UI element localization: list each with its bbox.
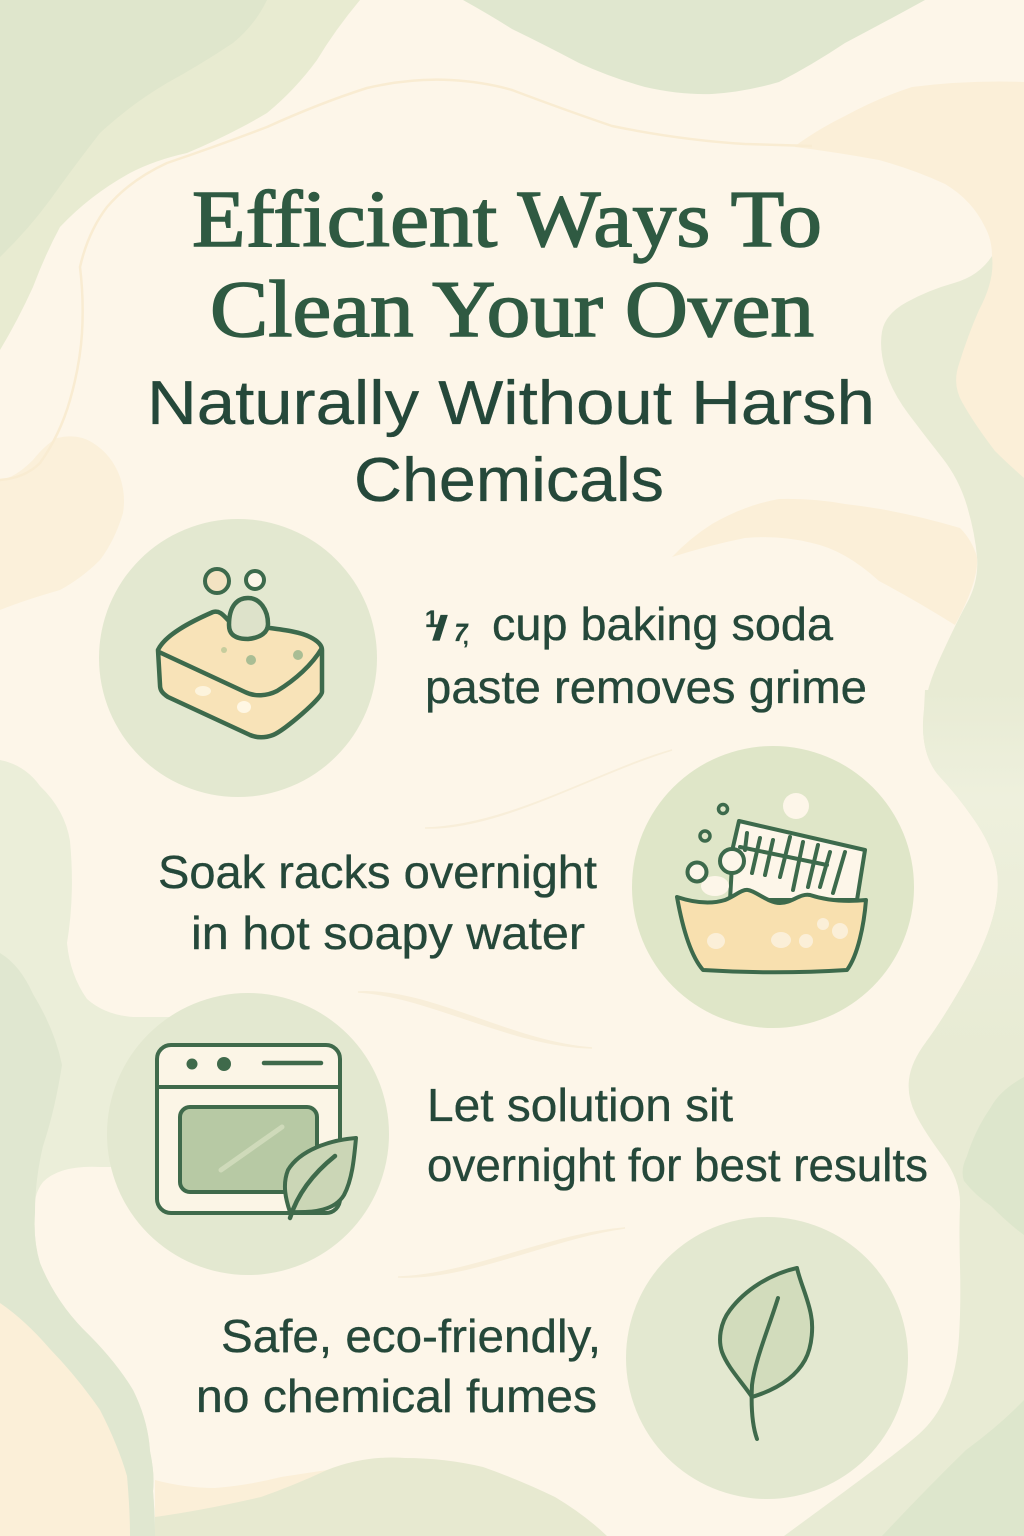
text: baking soda: 1: [425, 606, 438, 633]
title: Efficient Ways To: [192, 176, 822, 264]
icon: rack soaking in basin: [632, 746, 914, 1028]
panel: safe eco-friendly: [196, 1217, 908, 1499]
decorative wisp: top flowing line: [0, 80, 812, 480]
subtitle: [147, 369, 875, 515]
decorative wisp: middle divider: [358, 992, 592, 1048]
text: let solution sit: overnight for best results: [427, 1139, 928, 1191]
title: Clean Your Oven: [210, 266, 814, 354]
text: let solution sit: [427, 1079, 928, 1191]
panel: soak racks: [158, 746, 914, 1028]
subtitle: Chemicals: [354, 446, 664, 515]
text: baking soda: [425, 598, 867, 713]
text: soak racks: Soak racks overnight: [158, 846, 597, 898]
decorative wisp: lower divider: [398, 1228, 625, 1277]
text: let solution sit: Let solution sit: [427, 1079, 733, 1131]
panel: let solution sit: [107, 993, 928, 1275]
text: baking soda: ,: [463, 627, 469, 649]
text: safe eco-friendly: no chemical fumes: [196, 1370, 597, 1422]
text: baking soda: /: [432, 610, 448, 648]
icon: leaf: [626, 1217, 908, 1499]
text: baking soda: paste removes grime: [425, 661, 867, 713]
text: safe eco-friendly: Safe, eco-friendly,: [221, 1310, 601, 1362]
icon: sponge with bubbles: [99, 519, 377, 797]
text: baking soda: cup baking soda: [492, 598, 833, 650]
decorative wisp: upper divider: [425, 750, 672, 828]
text: soak racks: [158, 846, 597, 959]
text: baking soda: 7: [451, 619, 471, 647]
text: soak racks: in hot soapy water: [191, 907, 585, 959]
icon: oven with leaf: [107, 993, 389, 1275]
title: [192, 176, 822, 354]
panel: baking soda: [99, 519, 867, 797]
text: safe eco-friendly: [196, 1310, 601, 1422]
subtitle: Naturally Without Harsh: [147, 369, 875, 438]
